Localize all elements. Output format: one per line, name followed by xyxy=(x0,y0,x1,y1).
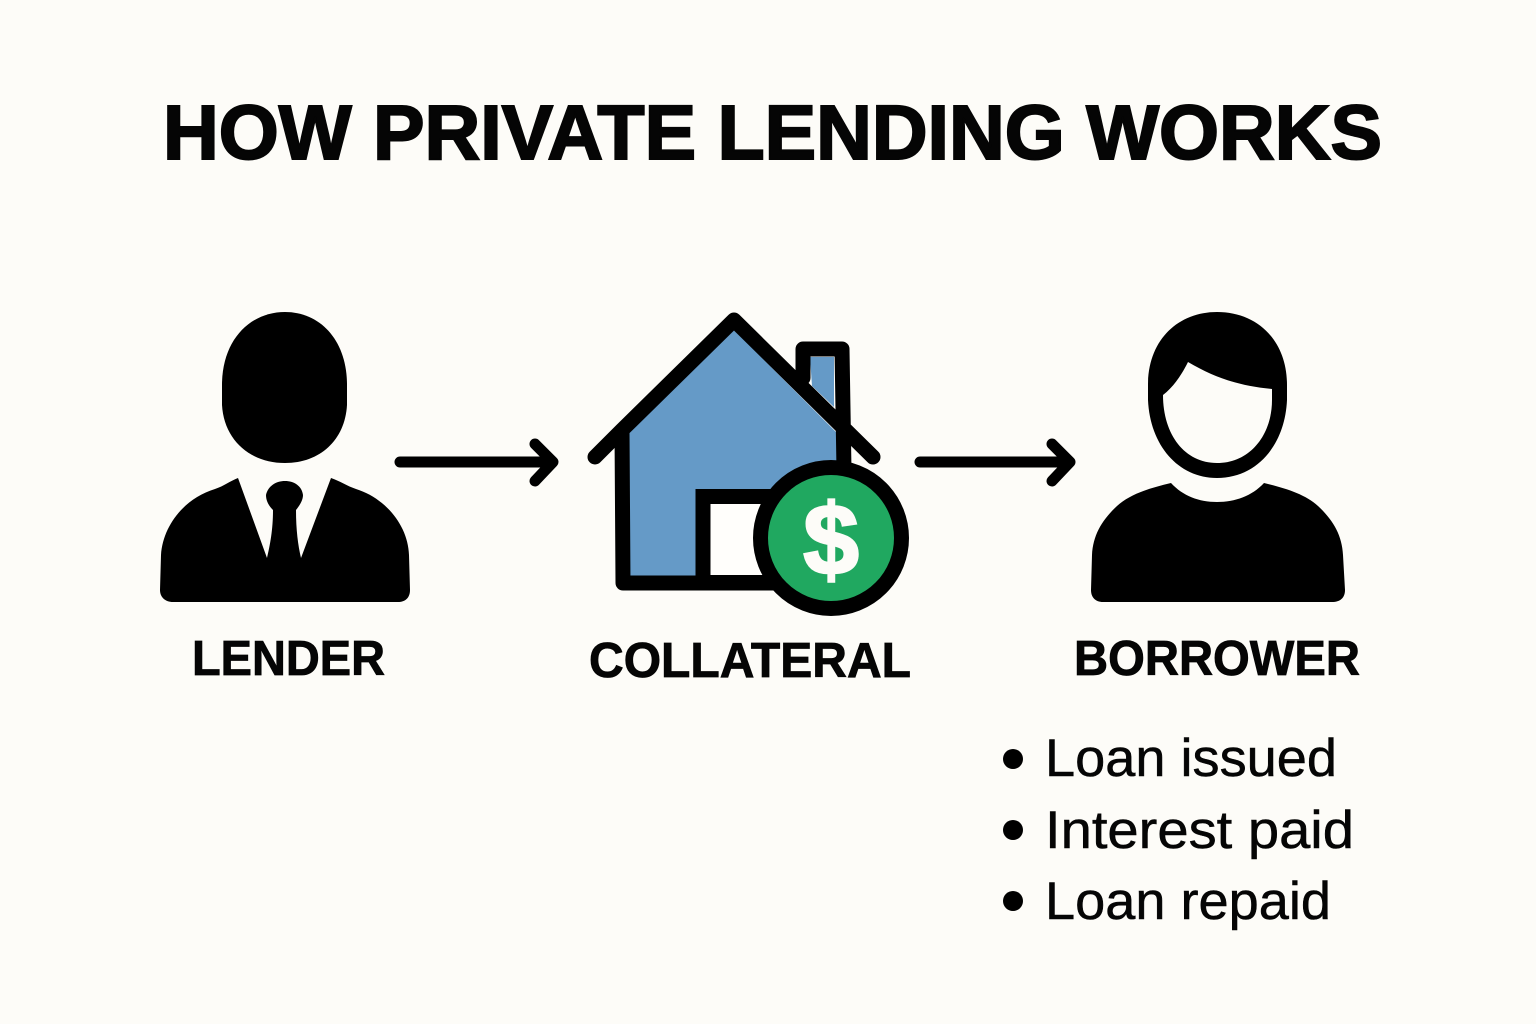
label: lender: LENDER xyxy=(192,632,385,686)
borrower head xyxy=(1148,312,1287,478)
label: collateral: COLLATERAL xyxy=(589,634,911,688)
lender head xyxy=(222,312,347,463)
label: borrower: BORROWER xyxy=(1074,632,1360,686)
dollar coin: $ xyxy=(803,484,859,596)
bullet list xyxy=(1003,729,1354,931)
dollar coin xyxy=(760,468,902,608)
bullet: interest paid: Interest paid xyxy=(1045,801,1354,860)
lender suit body xyxy=(160,478,410,602)
icon: borrower xyxy=(1091,312,1345,602)
house outline xyxy=(595,320,873,583)
house body xyxy=(629,330,837,576)
door xyxy=(703,496,783,582)
icon: house with dollar coin xyxy=(595,320,902,608)
arrow: lender to collateral xyxy=(400,444,553,481)
bullet: loan repaid: Loan repaid xyxy=(1045,872,1331,931)
title: HOW PRIVATE LENDING WORKS xyxy=(163,90,1382,176)
bullet: loan issued: Loan issued xyxy=(1045,729,1337,788)
arrow: collateral to borrower xyxy=(920,444,1070,481)
chimney fill xyxy=(810,357,834,407)
icon: lender in suit and tie xyxy=(160,312,410,602)
borrower body xyxy=(1091,483,1345,602)
